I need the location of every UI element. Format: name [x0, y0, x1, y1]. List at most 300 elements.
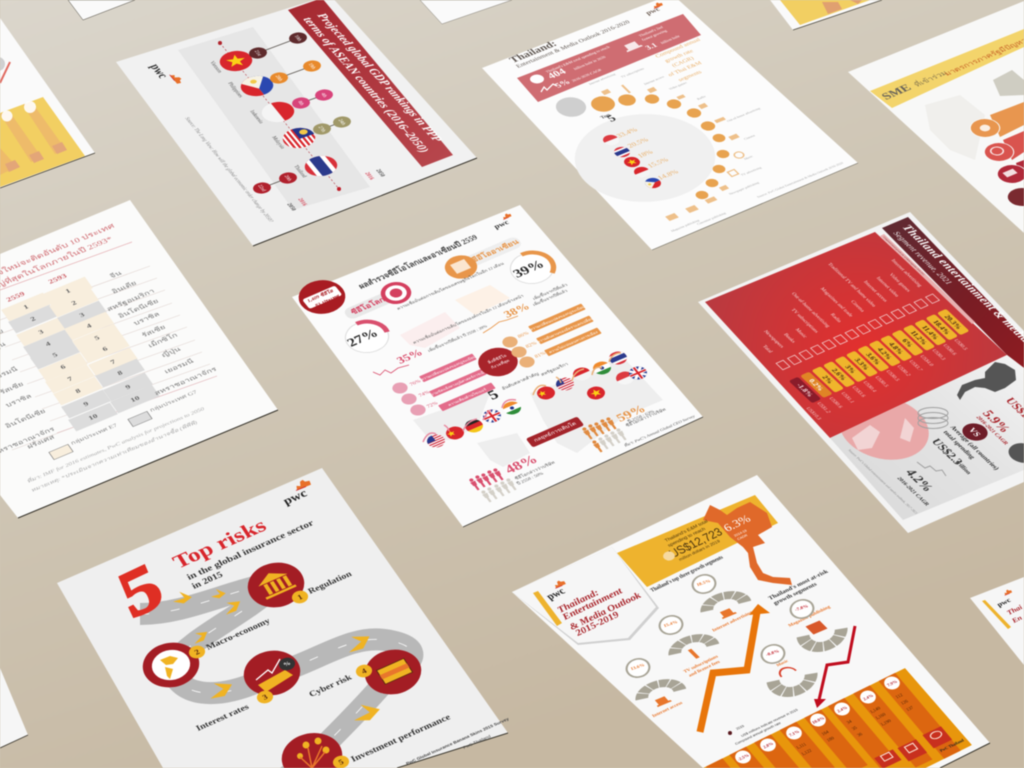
confidence text — [395, 261, 569, 353]
revenue values: US$0.5 — [873, 376, 889, 388]
country names 2593: รัสเซีย — [140, 323, 167, 339]
rank numbers: 8 — [74, 387, 82, 395]
segment boxes — [874, 726, 952, 768]
rank numbers: 3 — [78, 311, 86, 319]
title — [555, 586, 643, 639]
confidence text: ความเชื่อมั่นต่อการเติบโตของเศรษฐกิจโลกในอีก 12 เดือน — [395, 261, 505, 311]
ranking dots: 28th — [273, 75, 283, 82]
source note: Source: The Long View: How will the global economic order change by 2050? — [183, 116, 275, 223]
CAGR heading: segments — [677, 70, 704, 83]
PwC credit: PwC Thailand — [938, 738, 966, 753]
segment labels: Radio — [696, 95, 707, 101]
column figures: 35 — [851, 725, 859, 731]
pink percent circles: 76% — [409, 379, 423, 387]
CAGR values: 11.2% — [908, 330, 929, 346]
heading: ที่เข้าร่วม — [911, 68, 949, 88]
country names 2559 — [0, 327, 56, 457]
Thailand stats — [974, 396, 1024, 446]
rank numbers: 2 — [29, 315, 37, 323]
CAGR strip: Compound annual growth rate of E&M segments 2016-2021 — [882, 236, 926, 276]
pictogram: 48% — [468, 453, 556, 503]
segment labels: Music — [794, 328, 808, 339]
segment labels: Music — [743, 155, 754, 161]
segment labels: Video games — [887, 273, 911, 293]
spending stat: US$12,723 — [666, 525, 725, 560]
section heading: at risk: Thailand's most at-risk — [768, 569, 830, 601]
segment labels: Video games — [668, 81, 688, 91]
CAGR values: 3.3% — [852, 357, 871, 371]
column figures: 126 — [900, 698, 910, 706]
spending stat: Thailand's E&M total — [664, 519, 709, 543]
CEO count badge: 83 ประเทศ — [314, 293, 343, 308]
source note: PwC Global Insurance Banana Skins 2015 Survey — [405, 716, 510, 766]
ranking dots: 4th — [319, 92, 328, 99]
pin dials: -7.8% — [795, 604, 809, 613]
pwc logo: pwc — [281, 487, 310, 507]
segment labels: Out-of-home advertising — [790, 292, 831, 329]
source note: Source: PwC's Global entertainment and media outlook, 2017-2021 — [846, 449, 919, 515]
pin dials: -0.8% — [766, 649, 780, 658]
sheet: right edge fragment with title: Thai — [1005, 603, 1024, 616]
CAGR values: 3% — [843, 364, 858, 374]
revenue values: US$10.3 — [804, 407, 822, 421]
sheet: CEO survey 2559 (centre) — [290, 205, 703, 527]
ranking dots: 10th — [292, 35, 302, 42]
row rules — [0, 266, 217, 450]
rank numbers: 7 — [66, 375, 74, 383]
sheet: right edge fragment with title: pwc — [995, 596, 1013, 608]
pwc logo — [281, 478, 312, 507]
title: ผลสำรวจซีอีโอโลกและอาเซียนปี 2559 — [356, 232, 479, 290]
segment labels: Cinema — [743, 134, 756, 141]
risk 5: investment performance: 5 — [337, 758, 345, 766]
ASEAN CEO icon and pill — [439, 236, 524, 283]
pink flags row — [423, 399, 524, 450]
segment labels: Newspapers — [762, 330, 784, 349]
segment labels: Newspaper publishing — [728, 181, 760, 196]
risk pills — [965, 102, 1024, 210]
icons in band — [530, 40, 643, 92]
heading: Top risks: Top risks — [169, 515, 270, 573]
data columns — [706, 672, 961, 768]
rank numbers: 5 — [51, 351, 59, 359]
pin dials — [624, 572, 816, 680]
risk 1: regulation — [238, 554, 353, 616]
dial values: 2.4% — [862, 693, 875, 701]
segment icons — [776, 294, 939, 370]
segment labels: Books — [782, 333, 796, 344]
map stat: 2014-19 — [733, 529, 748, 538]
country labels: Vietnam — [208, 60, 223, 74]
rank numbers: 4 — [85, 322, 93, 330]
bar captions: ความเปลี่ยนแปลงของกฎระเบียบ — [419, 354, 477, 382]
segment labels: Internet video — [874, 277, 900, 298]
orange percent circles: 81% — [534, 351, 548, 359]
ASEAN CEO icon and pill: ซีอีโออาเซียน — [469, 237, 521, 264]
heading — [878, 29, 1024, 102]
pwc logo: pwc — [147, 63, 170, 80]
ranking dots: 24th — [336, 119, 346, 126]
sheet: right edge fragment with title — [970, 577, 1024, 665]
risk 1: regulation: Regulation — [306, 569, 353, 596]
pictogram: 48%: ซีอีโอกล่าวว่าบริษัท — [513, 460, 556, 481]
stat: digital: Thailand's 2nd — [637, 25, 664, 38]
segment labels: Magazines and trade — [819, 287, 854, 318]
top 5 heading: Top — [599, 113, 612, 120]
ranking dots: 22nd — [256, 184, 267, 193]
bar captions — [419, 304, 599, 407]
bar captions: ความไม่แน่นอนทางการเมือง — [548, 330, 599, 354]
column figures: 137 — [905, 705, 915, 712]
pictogram: 59%: ซีอีโอกล่าวว่าบริษัท — [624, 407, 667, 428]
country labels: Philippines — [226, 81, 244, 98]
revenue values: US$1.2 — [815, 402, 831, 414]
column figures: 1,160 — [874, 712, 888, 721]
semi-ring: music — [773, 658, 813, 696]
risk 3: interest rates: % — [282, 660, 292, 668]
revenue values: US$3.7 — [907, 360, 923, 372]
dial values: 7.9% — [886, 679, 899, 687]
table column 2593 — [43, 277, 160, 413]
semi-ring: internet advertising: Internet advertising — [712, 611, 754, 633]
year labels: 2016 — [363, 171, 375, 181]
rank numbers: 1 — [64, 287, 72, 295]
CAGR values: -1.8% — [795, 382, 815, 398]
legend: 2015 — [735, 724, 745, 731]
rank numbers: 7 — [109, 358, 117, 366]
rank numbers: 5 — [93, 334, 101, 342]
gauge: 27%: 27% — [344, 326, 381, 350]
orange percent circles — [500, 331, 548, 370]
stat: digital: billion baht — [659, 34, 682, 45]
CAGR values: 18.4% — [931, 319, 952, 336]
risk 3: interest rates: 3 — [261, 693, 269, 701]
segment labels: Internet access — [643, 75, 666, 86]
source note: หมายเหตุ: *ประเมินจากความเท่าเทียมของอำนาจซื้อ (พีพีพี) — [29, 419, 199, 493]
rank numbers: 4 — [44, 340, 52, 348]
country labels: Indonesia — [248, 109, 265, 125]
country names 2593 — [105, 269, 218, 397]
flag: Philippines — [235, 72, 279, 100]
confidence text: เพิ่มขึ้นจากปีที่แล้ว — [531, 288, 569, 307]
revenue values: US$0.3 — [930, 349, 946, 361]
top 5 heading: สหรัฐอเมริกา — [540, 362, 570, 377]
gauge: 27% — [338, 316, 396, 358]
source note: PwC Thailand — [462, 734, 492, 750]
pictogram: 59% — [581, 402, 667, 453]
world spending stats: 2016-2021 CAGR — [895, 476, 930, 507]
ranking dots: 8th — [296, 100, 305, 107]
rank numbers: 6 — [59, 363, 67, 371]
CAGR values: 20.3% — [942, 314, 964, 330]
country names 2559: อินโดนีเซีย — [3, 407, 47, 430]
gauge: 39% — [503, 247, 561, 289]
confidence text: เพิ่มขึ้นจากปีที่แล้ว — [531, 282, 569, 301]
pink stat band — [517, 14, 701, 102]
pwc logo: pwc — [492, 218, 511, 230]
legend — [728, 708, 799, 746]
stat: digital: fastest growing — [640, 29, 668, 42]
chart backdrop — [178, 27, 370, 210]
bar captions: ความขัดแย้งทางภูมิศาสตร์การเมือง — [427, 368, 490, 398]
ranking dots: 20th — [282, 175, 292, 182]
light map — [925, 70, 1024, 160]
country names 2593: สหรัฐอเมริกา — [105, 287, 156, 313]
sheet: left orange fragment — [0, 18, 95, 188]
maroon button — [526, 416, 584, 448]
top 5 values: 18% — [635, 148, 655, 159]
segment labels: Magazine publishing — [670, 219, 701, 233]
section heading: at risk: growth segments — [773, 582, 819, 606]
arrow: growth — [700, 604, 770, 732]
country names 2593: สหราชอาณาจักร — [153, 365, 218, 397]
segment labels: TV subscriptions — [789, 308, 819, 334]
title band — [882, 217, 1024, 368]
CAGR values — [795, 314, 964, 398]
orange data panel — [703, 668, 972, 768]
legend: กลุ่มประเทศ G7 — [149, 389, 199, 413]
arrow: decline — [814, 626, 855, 708]
timeline axis — [218, 41, 341, 191]
section heading: top growth: Thailand's top three growth segments — [650, 555, 725, 593]
dial values — [736, 679, 899, 762]
central threats circle: สิ่งที่ซีอีโอ — [486, 352, 508, 365]
CAGR heading: (CAGR) — [670, 56, 696, 68]
stat: spending: 5% — [553, 78, 572, 89]
risk 2: macro-economy: 2 — [193, 648, 201, 656]
column headers: 2559 — [5, 290, 26, 303]
column figures: 180 — [826, 735, 836, 743]
global CEO icon and pill: ซีอีโอโลก — [349, 295, 387, 316]
world map backdrop — [413, 357, 663, 467]
sheet: 5 top risks — [57, 468, 510, 768]
title: Thailand: — [555, 588, 601, 615]
column figures: 1,190 — [879, 718, 893, 727]
sheet: Thailand entertainment and media outlook 2016-2020 — [482, 0, 858, 250]
top 5 flags — [600, 133, 664, 190]
yellow banner — [617, 495, 778, 587]
risk 3: interest rates — [194, 642, 310, 733]
rank numbers: 2 — [70, 299, 78, 307]
sheet: SME measures (right) — [848, 1, 1024, 233]
subheading: in 2015 — [190, 570, 225, 591]
growth circles — [586, 92, 732, 201]
sheet: top-left corner fragment — [68, 0, 135, 20]
segment labels: Internet access — [862, 280, 888, 303]
column figures — [795, 692, 915, 757]
spending stat: million dollars in 2019 — [678, 539, 721, 562]
risk 5: investment performance: Investment performance — [349, 712, 452, 764]
CAGR bars — [789, 309, 970, 403]
title: Segment revenue, 2021 — [891, 230, 954, 286]
top 5 blob — [548, 97, 742, 219]
CAGR values: 3.6% — [864, 352, 882, 366]
stat: 38%: 38% — [501, 301, 532, 320]
CAGR values: 11.4% — [920, 325, 941, 341]
map stat: 6.3% — [721, 512, 753, 534]
pwc logo — [492, 212, 512, 230]
title band — [288, 0, 453, 167]
title rule — [0, 242, 132, 290]
segment labels: Total — [761, 345, 773, 354]
flag: Indonesia — [256, 98, 300, 126]
CEO count badge: 1,409 ซีอีโอ — [306, 288, 336, 304]
rank numbers: 1 — [22, 303, 30, 311]
CEO count badge — [290, 274, 354, 320]
revenue values: US$4.0 — [918, 355, 934, 367]
revenue values: US$0.5 — [952, 339, 968, 351]
Thailand map — [703, 502, 792, 585]
semi-ring: internet advertising — [705, 592, 754, 633]
revenue values: US$0.6 — [827, 397, 843, 409]
source note: ที่มา: IMF for 2016 estimates, PwC analysis for projections to 2050 — [25, 405, 206, 484]
table column 2559 — [1, 293, 118, 431]
Thailand stats: 5.9% — [979, 408, 1014, 434]
central threats circle — [471, 342, 525, 382]
title tag — [512, 547, 659, 645]
CAGR strip — [880, 234, 975, 324]
sheet: Thailand E&M segment revenue 2021 — [698, 212, 1024, 533]
risk 4: cyber risk: 4 — [360, 667, 368, 675]
column headers: 2593 — [47, 272, 68, 285]
top 5 heading: 5 — [604, 112, 619, 124]
rank numbers: 9 — [124, 383, 132, 391]
title tag accent — [533, 591, 562, 626]
top 5 values: 33.4% — [614, 126, 639, 139]
top 5 values — [614, 126, 680, 181]
revenue values: US$1.1 — [839, 392, 855, 404]
country names 2593: ญี่ปุ่น — [159, 344, 183, 359]
country names 2593: จีน — [108, 269, 124, 280]
sheet: lower-left edge fragment — [0, 668, 28, 748]
segment labels: Internet advertising — [588, 73, 617, 86]
pictogram: 59%: ปี 2558 : 63% — [626, 408, 656, 425]
dial values: 2.4% — [836, 705, 849, 713]
CAGR values: 4.2% — [875, 347, 894, 361]
sheet: projected GDP rankings — [116, 0, 477, 246]
stat: spending: billion baht in 2020 — [572, 55, 607, 71]
dial values: -2.5% — [736, 752, 750, 762]
flag: Malaysia — [277, 124, 321, 152]
world spending stats: total spending — [941, 430, 977, 460]
red panel — [705, 232, 1007, 438]
Thailand map — [957, 362, 1016, 400]
dial values: 2.8% — [762, 741, 775, 749]
column dials — [732, 674, 903, 766]
sheet: top-centre corner fragment — [420, 0, 512, 24]
ranking dots: 21st — [252, 50, 262, 57]
pwc logo: pwc — [544, 586, 568, 602]
spending stat: spending to reach — [667, 526, 707, 548]
pink bars — [419, 354, 496, 411]
bar captions: ความผันผวนของอัตราแลกเปลี่ยน — [536, 316, 595, 344]
trend lines — [373, 316, 518, 375]
column figures: 164 — [820, 729, 830, 736]
revenue values: US$0.6 — [941, 344, 957, 356]
pin dials: 13.6% — [630, 663, 646, 672]
central threats circle: กังวลที่สุด — [489, 358, 511, 370]
legend: Compound annual growth rate — [734, 721, 782, 746]
rank numbers: 10 — [87, 412, 99, 422]
semi-ring: magazine publishing — [788, 605, 843, 651]
pink percent circles: 72% — [426, 401, 440, 409]
semi-ring: TV subscriptions — [673, 635, 721, 678]
column figures: 1,111 — [795, 741, 808, 751]
big number 5: 5 — [108, 548, 172, 632]
VS badge: VS — [966, 426, 984, 438]
CAGR heading: Compound annual — [655, 37, 702, 59]
global CEO icon and pill — [342, 278, 417, 320]
column figures: 1,140 — [869, 705, 883, 715]
map stat: CAGR — [736, 533, 749, 541]
revenue values: US$0.5 — [884, 370, 900, 382]
pwc logo — [544, 579, 568, 602]
stat: digital: 3.1 — [643, 41, 659, 51]
stat: digital — [637, 25, 682, 51]
orange bars — [528, 304, 602, 356]
yellow data panel — [0, 97, 85, 187]
heading: SME — [878, 82, 914, 102]
source note: ที่มา: PwC's Annual Global CEO Survey — [622, 413, 696, 448]
legend: US$ millions indicate revenue in 2015 — [740, 708, 799, 738]
heading: Thailand: — [507, 39, 560, 65]
world spending stats: trillion — [953, 460, 973, 476]
country names 2593: เม็กซิโก — [146, 331, 179, 349]
segment labels: TV subscriptions — [620, 67, 646, 79]
segment labels: Traditional TV and home video — [826, 262, 877, 308]
title: 2015-2019 — [572, 610, 622, 639]
segment labels: Source: PwC Global Entertainment & Media Outlook 2016-2020 — [756, 161, 845, 199]
spending trend icon — [917, 462, 946, 476]
dial values: 10.0% — [811, 715, 826, 725]
column figures: 1,122 — [800, 748, 814, 757]
stat: spending — [544, 45, 611, 89]
CAGR heading — [655, 37, 704, 83]
ranking dots — [246, 30, 354, 196]
segment labels: Radio — [828, 313, 842, 324]
pink percent circles: 74% — [418, 390, 432, 398]
world spending stats — [895, 425, 1000, 507]
column headers — [5, 272, 68, 303]
rank numbers: 6 — [101, 345, 109, 353]
segment labels — [588, 67, 845, 233]
road — [140, 582, 412, 768]
flag: Vietnam — [214, 47, 258, 75]
flag: Thailand — [299, 152, 343, 180]
semi-ring: music: Music — [775, 658, 789, 667]
pink percent circles — [390, 379, 440, 418]
revenue values: US$0.4 — [861, 381, 877, 393]
confidence text: ความเชื่อมั่นต่อการเติบโตขององค์กรในอีก 12 เดือนข้างหน้า — [411, 293, 524, 345]
legend: กลุ่มประเทศ E7 — [70, 422, 119, 446]
rank numbers: 3 — [37, 328, 45, 336]
ranking dots: 19th — [306, 63, 316, 70]
pwc logo: pwc — [643, 5, 663, 16]
revenue values: US$3.6 — [850, 386, 866, 398]
risk 2: macro-economy: Macro-economy — [204, 616, 272, 652]
title: Projected global GDP rankings in PPP — [314, 12, 444, 144]
country names 2593: อินโดนีเซีย — [116, 297, 160, 320]
orange percent circles: 82% — [525, 341, 539, 349]
world spending stats: 4.2% — [902, 467, 937, 493]
ranking dots: 27th — [316, 126, 326, 133]
growth icons — [601, 85, 746, 221]
top 5 heading: อันดับตลาดสำคัญ — [501, 372, 540, 391]
grey badge — [1003, 439, 1024, 467]
title — [300, 12, 444, 154]
heading: Entertainment & Media Outlook 2016-2020 — [515, 19, 632, 69]
risk 3: interest rates: Interest rates — [194, 702, 251, 733]
